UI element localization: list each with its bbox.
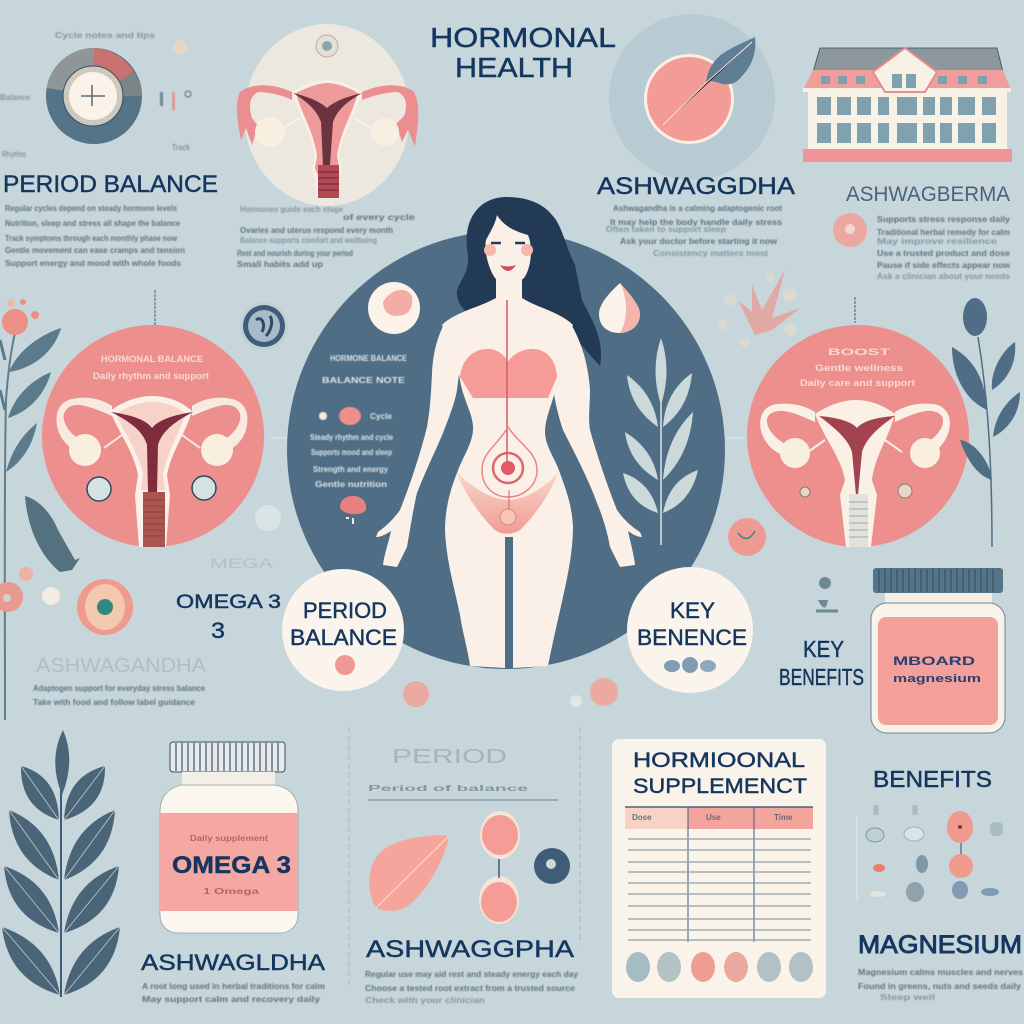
icon: cycle dial [46,48,142,144]
icon: omega 3 bottle: OMEGA 3 [172,852,291,879]
icon: building [803,48,1012,162]
text block: inside circle: HORMONE BALANCE [330,354,408,363]
icon: small flower in circle [340,496,366,524]
text block: period balance: Nutrition, sleep and stress all shape the balance [5,219,181,228]
text block: bottom center [365,970,579,1005]
left arm [376,322,462,567]
heading: ashwagandha top: ASHWAGGDHA [597,173,795,200]
midline and spiral [506,300,508,462]
panel: key benefits bubble: BENENCE [637,625,747,650]
text block: omega label: 3 [211,618,225,643]
text block: key benefits label: KEY [803,636,844,662]
text block: under top uterus: Balance supports comfort and wellbeing [240,236,377,245]
text block: top-left notes: Rhythm [2,150,26,159]
briefs [457,472,558,534]
panel: hormonal supplement table: Use [706,813,721,822]
panel: key benefits bubble [627,567,753,693]
text block: faded left: Adaptogen support for everyday stress balance [33,684,206,693]
text block: bottom left [142,982,325,1004]
text block: inside circle: Steady rhythm and cycle [310,433,393,442]
icon grid: benefits [857,805,1003,902]
text block: magnesium [858,968,1024,1002]
text block: magnesium: Magnesium calms muscles and nerves [858,968,1024,977]
top [460,349,557,398]
panel: hormonal supplement table: HORMIOONAL [633,749,805,772]
panel: center bottom period: PERIOD [392,746,507,768]
icon: pink sprig [717,270,800,347]
text block: ashwagandha top: Ask your doctor before starting it now [620,237,778,246]
text block: right notes: May improve resilience [877,237,998,246]
text block: right notes: Use a trusted product and dose [877,249,1011,258]
title: HEALTH [455,52,573,83]
text block: ashwagandha top [606,204,783,258]
text block: ashwagandha top: Consistency matters most [653,249,768,258]
text block: right notes: Pause if side effects appear now [877,261,1011,270]
panel: right pink uterus circle [747,325,969,547]
icon: omega 3 bottle: 1 Omega [203,887,260,896]
text block: ashwagandha top: Ashwagandha is a calming adaptogenic root [613,204,782,213]
text block: magnesium: Found in greens, nuts and seeds daily [858,982,1022,991]
panel: left pink uterus circle: HORMONAL BALANCE [101,354,203,364]
icon: right plant [952,298,1020,547]
text block: key benefits label: BENEFITS [779,664,864,690]
icon: omega 3 bottle: Daily supplement [190,834,268,843]
heading: ashwagandha faded: ASHWAGBERMA [846,183,1010,206]
text block: under top uterus: Ovaries and uterus respond every month [240,226,393,235]
icon: small round seal [240,302,288,350]
icon: omega 3 bottle [160,742,298,933]
text block: period balance: Regular cycles depend on steady hormone levels [5,204,178,213]
text block: ashwagandha top: It may help the body handle daily stress [610,218,783,227]
text block: inside circle: Gentle nutrition [315,480,387,489]
heading: ashwagandha bottom left: ASHWAGLDHA [141,950,325,975]
text block: inside circle: Strength and energy [313,465,389,474]
panel: left pink uterus circle: Daily rhythm and support [93,371,209,381]
text block: period balance: Gentle movement can ease cramps and tension [5,246,185,255]
panel: period balance bubble: BALANCE [290,625,397,650]
panel: top uterus circle [237,24,418,206]
hair [457,197,601,366]
panel: right pink uterus circle: Daily care and support [800,378,915,388]
text block: right notes: Ask a clinician about your needs [877,272,1011,281]
text block: bottom left: A root long used in herbal traditions for calm [142,982,325,991]
panel: hormonal supplement table: Dose [632,813,652,822]
text block: right notes [877,215,1011,281]
panel: central body circle [287,197,725,669]
text block: magnesium: Sleep well [880,993,935,1002]
icon: left plant [0,299,61,720]
text block: top-left notes: Cycle notes and tips [55,31,156,40]
text block: inside circle: Cycle [370,412,393,421]
text block: bottom center: Choose a tested root extract from a trusted source [365,984,576,993]
text block: inside circle: BALANCE NOTE [322,376,406,385]
text block: bottom center: Check with your clinician [365,996,485,1005]
text block: omega label: MEGA [210,555,274,571]
right arm [552,322,642,567]
text block: under top uterus: Small habits add up [237,260,323,269]
panel: center bottom period [349,727,580,985]
panel: left pink uterus circle [42,325,264,547]
heading: ashwagandha bottom center: ASHWAGGPHA [366,936,574,963]
text block: right notes: Supports stress response daily [877,215,1011,224]
panel: key benefits bubble: KEY [670,598,715,623]
panel: hormonal supplement table: SUPPLEMENCT [633,775,807,798]
text block: top-left notes [0,31,191,159]
panel: period balance bubble: PERIOD [303,598,387,623]
text block: under top uterus [237,205,416,269]
icon: small flower badge [833,213,867,247]
text block: under top uterus: Rest and nourish during your period [237,249,353,258]
icon: leaf sprig in circle [623,338,698,545]
text block: period balance: Track symptoms through each monthly phase now [5,234,178,243]
text block: period balance: Support energy and mood with whole foods [5,259,182,268]
panel: hormonal supplement table: Time [774,813,793,822]
heading: period balance: PERIOD BALANCE [3,171,218,198]
heading: ashwagandha faded left: ASHWAGANDHA [36,655,207,677]
title [430,22,616,83]
text block: top-left notes: Balance [0,93,31,102]
icon: magnesium bottle: MBOARD [893,654,975,668]
icon: right drop bubble [599,283,640,333]
text block: right notes: Traditional herbal remedy for calm [877,228,1010,237]
icon: magnesium bottle: magnesium [893,673,981,685]
text block: top-left notes: Track [172,143,190,152]
text block: inside circle: Supports mood and sleep [311,448,392,457]
panel: center bottom period: Period of balance [368,784,529,793]
heading: magnesium: MAGNESIUM [858,931,1022,959]
text block: faded left [33,684,206,707]
panel: right pink uterus circle: BOOST [828,347,891,357]
icon: supplement leaf badge [609,14,775,180]
title: HORMONAL [430,22,616,53]
text block: ashwagandha top: Often taken to support sleep [606,225,726,234]
panel: right pink uterus circle: Gentle wellness [815,363,903,373]
text block: bottom left: May support calm and recovery daily [142,995,321,1004]
text block: omega label [176,555,281,643]
text block: under top uterus: of every cycle [343,213,416,222]
figure torso and legs [442,270,573,668]
text block: faded left: Take with food and follow label guidance [33,698,196,707]
face [485,215,531,283]
text block: key benefits label [779,636,864,690]
text block: period balance [5,204,185,268]
icon: lower-left plant [2,730,120,997]
heading: benefits: BENEFITS [873,766,992,792]
panel: period balance bubble [282,569,404,691]
icon: cell and small dots left [0,496,133,635]
text block: omega label: OMEGA 3 [176,592,281,613]
text block: inside circle [310,354,408,489]
text block: bottom center: Regular use may aid rest and steady energy each day [365,970,579,979]
icon: small decorations [155,290,855,707]
icon: magnesium bottle [871,568,1005,733]
icon: left breast bubble [368,282,420,334]
panel: hormonal supplement table [612,739,826,998]
text block: under top uterus: Hormones guide each stage [240,205,344,214]
